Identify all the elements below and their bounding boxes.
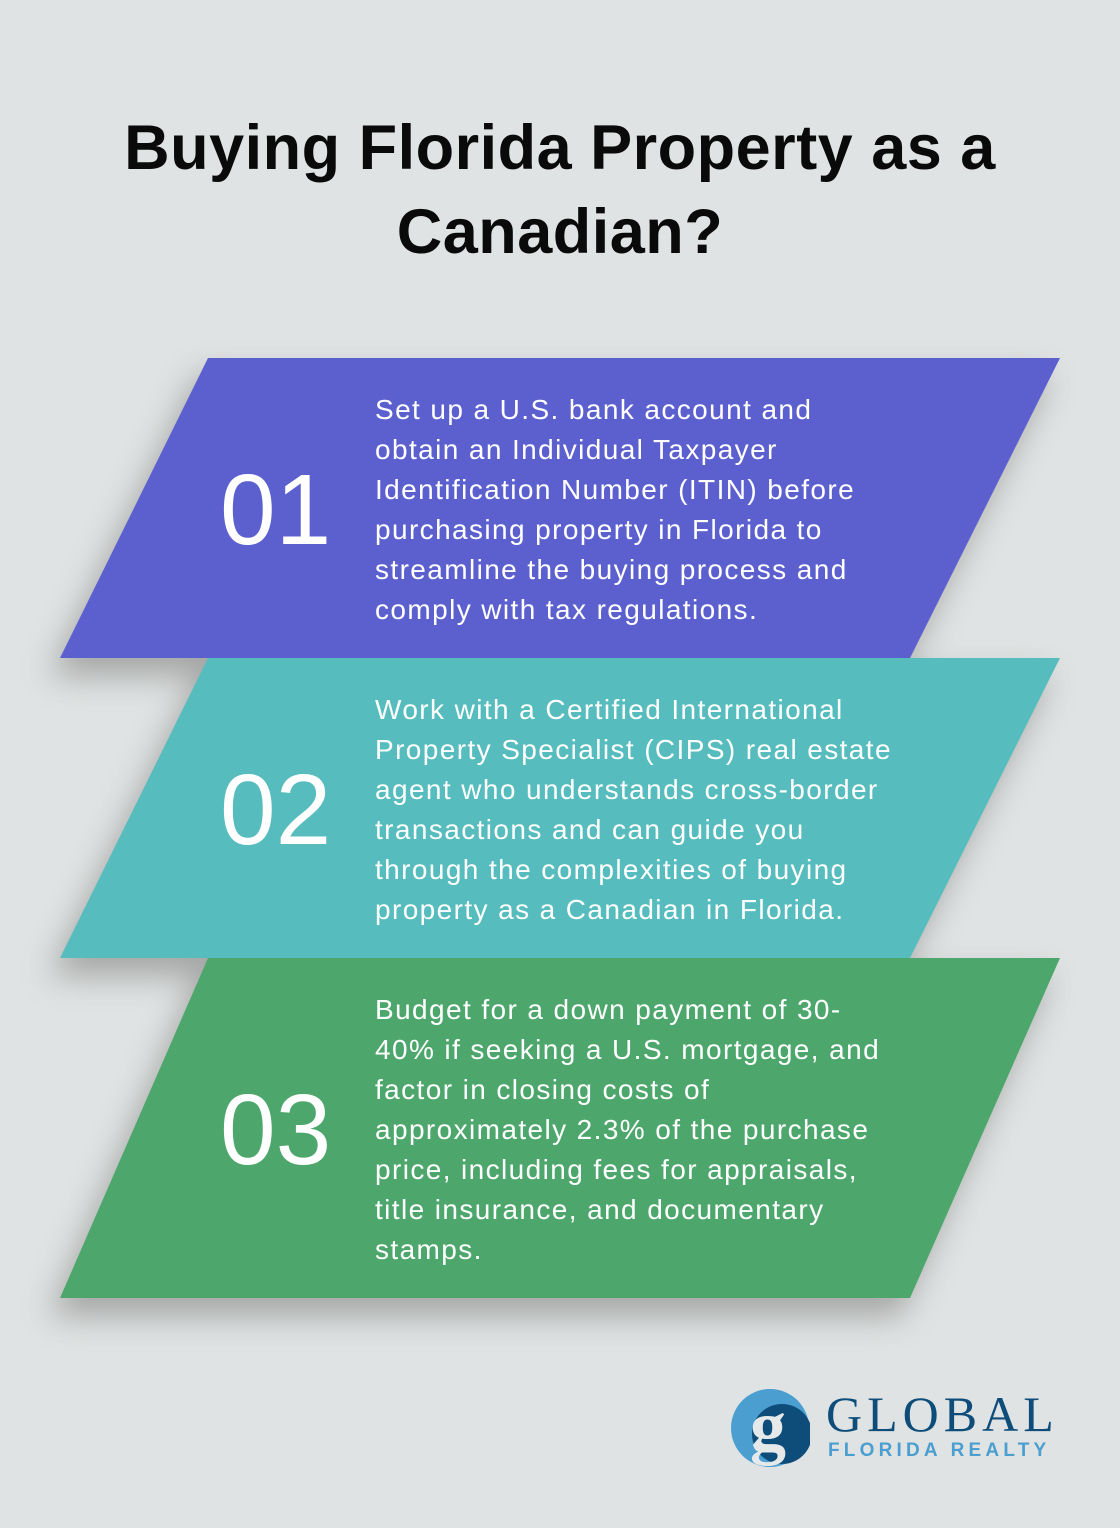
panel 1 text: Identification Number (ITIN) before <box>375 474 855 505</box>
panel 3 text: factor in closing costs of <box>375 1074 710 1105</box>
panel 3 text: approximately 2.3% of the purchase <box>375 1114 869 1145</box>
panel 1 shape <box>60 358 1060 658</box>
panel 1 text: streamline the buying process and <box>375 554 848 585</box>
panel 3 number: 03 <box>220 1074 331 1186</box>
panel 3 text: price, including fees for appraisals, <box>375 1154 858 1185</box>
panel 2 text: transactions and can guide you <box>375 814 805 845</box>
logo <box>731 1386 1059 1467</box>
panel 1 text: Set up a U.S. bank account and <box>375 394 812 425</box>
panel 1 text <box>375 394 855 625</box>
panel 2 text: Property Specialist (CIPS) real estate <box>375 734 892 765</box>
logo subtitle: FLORIDA REALTY <box>828 1440 1050 1461</box>
panel 1 text: obtain an Individual Taxpayer <box>375 434 778 465</box>
panel 3 text: Budget for a down payment of 30- <box>375 994 842 1025</box>
panel 3 text: title insurance, and documentary <box>375 1194 824 1225</box>
panel 2 shape <box>60 658 1060 958</box>
panel shadows <box>50 376 1050 1316</box>
panel 2 text: agent who understands cross-border <box>375 774 879 805</box>
panel 1 text: comply with tax regulations. <box>375 594 758 625</box>
panel 1 number: 01 <box>220 454 331 566</box>
icon: g circle: g <box>750 1388 786 1466</box>
panel 2 number: 02 <box>220 754 331 866</box>
panel 2 text: Work with a Certified International <box>375 694 844 725</box>
panel 3 text: 40% if seeking a U.S. mortgage, and <box>375 1034 880 1065</box>
title: Buying Florida Property as a <box>124 113 996 183</box>
panel 3 text <box>375 994 880 1265</box>
title <box>124 113 996 267</box>
panel 1 text: purchasing property in Florida to <box>375 514 823 545</box>
panel 2 text <box>375 694 892 925</box>
panel 3 text: stamps. <box>375 1234 483 1265</box>
panel 3 shape <box>60 958 1060 1298</box>
title: Canadian? <box>397 197 723 267</box>
panel 2 text: through the complexities of buying <box>375 854 848 885</box>
icon: g circle <box>731 1388 810 1467</box>
panel 2 text: property as a Canadian in Florida. <box>375 894 844 925</box>
logo wordmark: GLOBAL <box>826 1386 1059 1442</box>
